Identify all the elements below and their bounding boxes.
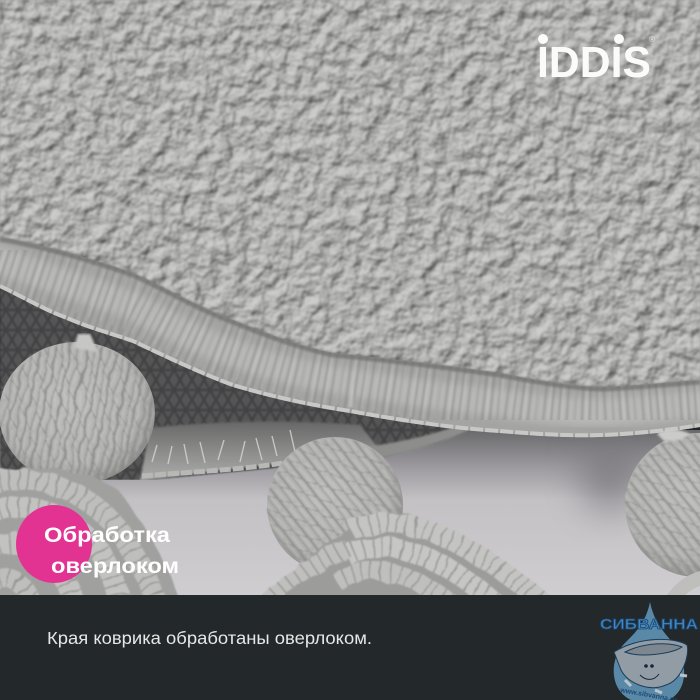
water drop (614, 602, 684, 700)
light backdrop (0, 430, 700, 595)
footer bar (0, 595, 700, 700)
pom-pom right (625, 430, 700, 577)
heading line two: оверлоком (51, 554, 179, 578)
logo wordmark: IDDIS (537, 38, 651, 87)
scalloped stitched edge (0, 286, 700, 435)
pom-pom left (0, 334, 155, 484)
badge heading (44, 523, 179, 578)
tassel left (0, 466, 178, 595)
logo name: СИБВАННА (600, 617, 699, 633)
looped rope band of the edge (0, 230, 700, 440)
tassel centre (262, 511, 548, 595)
Sibvanna logo (600, 602, 699, 700)
footer caption: Края коврика обработаны оверлоком. (47, 628, 372, 648)
tassel right corner (672, 577, 700, 600)
dark shadow beside the right pom-pom (580, 439, 640, 511)
fluffy pile (0, 0, 700, 410)
pile noise field (0, 0, 700, 410)
heading line one: Обработка (44, 523, 171, 547)
registered mark: ® (649, 35, 655, 44)
logo dot, fourth letter (614, 34, 624, 44)
smiling bathtub (614, 639, 688, 693)
pile surface (0, 0, 700, 410)
badge: pink blob (16, 505, 92, 583)
pile texture (0, 0, 700, 410)
logo dot, first letter (538, 34, 548, 44)
shadow between pile and rope band (0, 239, 700, 389)
pom-pom centre (267, 437, 403, 573)
anti-slip backing (0, 280, 470, 480)
overlock stitched strip (140, 422, 468, 481)
brand logo: IDDIS (537, 34, 655, 87)
